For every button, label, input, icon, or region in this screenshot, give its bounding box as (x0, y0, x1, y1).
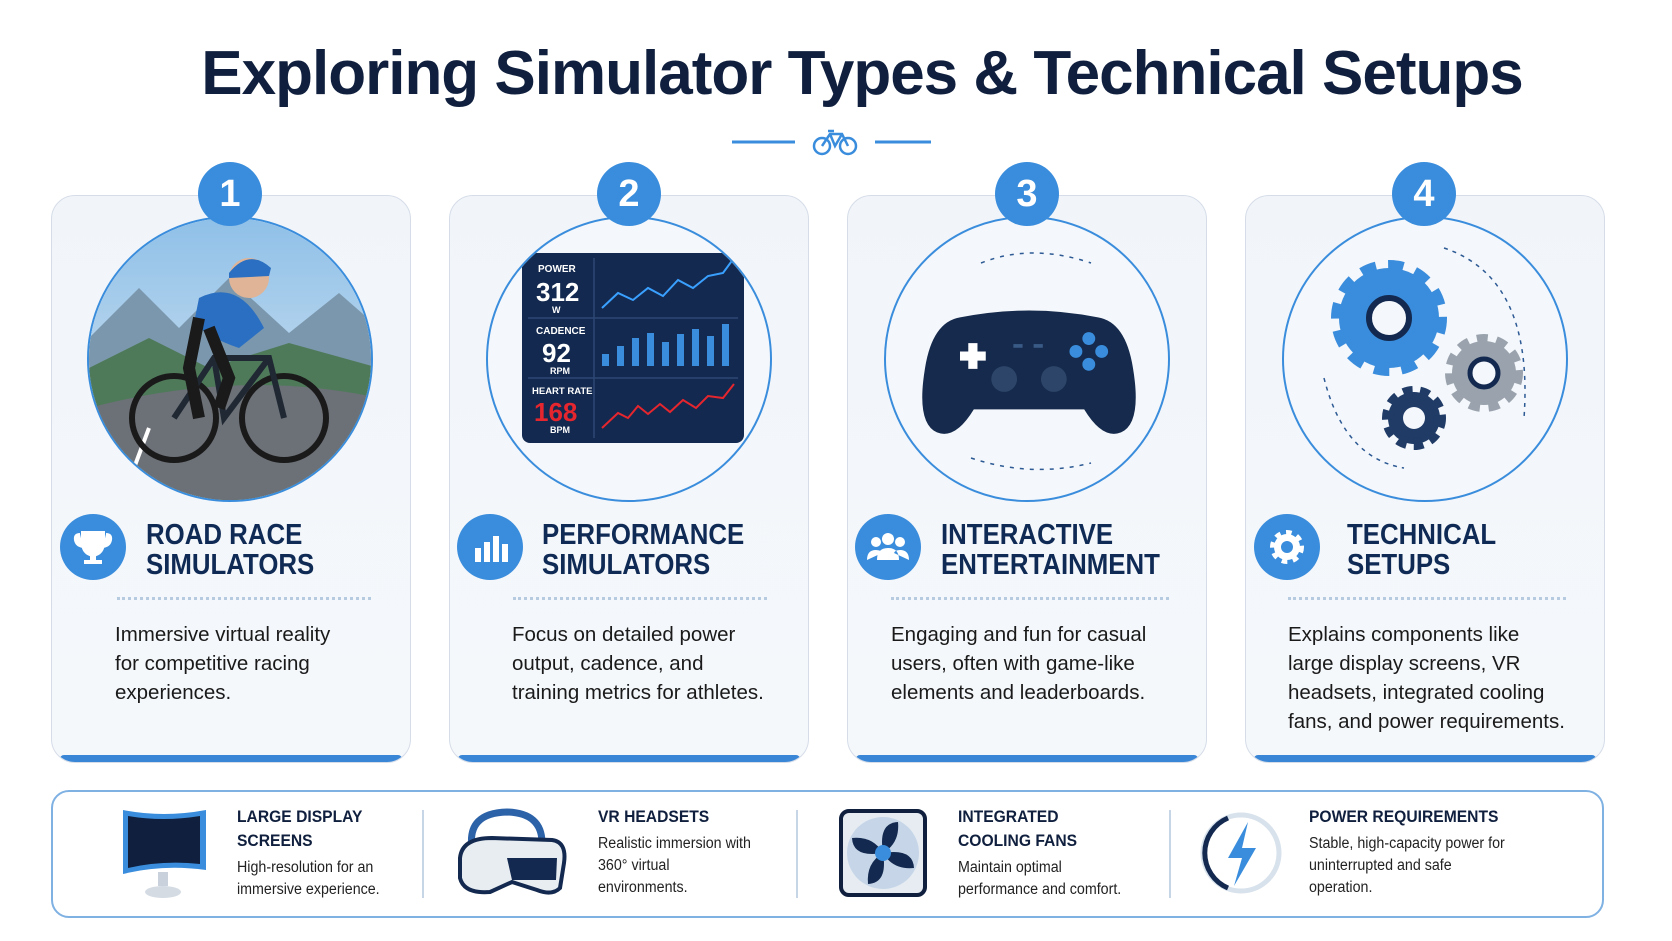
component 2 text: VR HEADSETS (598, 807, 709, 826)
component 1 text (237, 807, 380, 898)
image circle 4: gears (1282, 216, 1568, 502)
image circle 2: dashboard: 312 (536, 277, 579, 307)
heading 1 (146, 519, 314, 581)
heading 4 (1347, 519, 1496, 581)
component 4 text: POWER REQUIREMENTS (1309, 807, 1498, 826)
icon: trophy (60, 514, 126, 580)
heading 1: ROAD RACE (146, 519, 302, 551)
component 3 text (958, 807, 1121, 898)
number 2 (597, 162, 661, 226)
heading 2: PERFORMANCE (542, 519, 744, 551)
heading 3 (941, 519, 1160, 581)
card 4: technical (1245, 195, 1605, 763)
description 1: Immersive virtual reality for competitive racing experiences. (115, 623, 330, 704)
image circle 2: dashboard: 92 (542, 338, 571, 368)
heading 2: SIMULATORS (542, 549, 710, 581)
number 3: 3 (1016, 173, 1038, 215)
card 1: road race (51, 195, 411, 763)
icon: cooling fan (839, 809, 927, 897)
image circle 1: cyclist (87, 216, 373, 502)
number 3 (995, 162, 1059, 226)
icon: gear (1254, 514, 1320, 580)
card 2: performance (449, 195, 809, 763)
bottom panel: components (51, 790, 1604, 918)
heading 2 (542, 519, 744, 581)
number 1: 1 (219, 173, 241, 215)
image circle 2: dashboard: W (552, 305, 561, 315)
component 3 text: Maintain optimal performance and comfort. (958, 859, 1121, 898)
image circle 2: dashboard: BPM (550, 425, 570, 435)
heading 1: SIMULATORS (146, 549, 314, 581)
number 1 (198, 162, 262, 226)
description 4: Explains components like (1288, 623, 1519, 646)
component 2 text (598, 807, 751, 896)
description 4 (1288, 623, 1565, 733)
image circle 2: dashboard (486, 216, 772, 502)
title ornament: bike icon with lines (732, 130, 931, 156)
icon: lightning bolt (1200, 812, 1282, 894)
description 3: Engaging and fun for casual users, often with game-like elements and leaderboards. (891, 623, 1146, 704)
number 4: 4 (1413, 173, 1435, 215)
image circle 2: dashboard: CADENCE (536, 326, 586, 337)
description 2: Focus on detailed power output, cadence, and training metrics for athletes. (512, 623, 764, 704)
heading 4: SETUPS (1347, 549, 1450, 581)
component 1 text: High-resolution for an immersive experience. (237, 859, 380, 898)
component 2 text: Realistic immersion with 360° virtual environments. (598, 835, 751, 896)
heading 3: ENTERTAINMENT (941, 549, 1160, 581)
heading 4: TECHNICAL (1347, 519, 1496, 551)
card 3: interactive (847, 195, 1207, 763)
component 3 text: COOLING FANS (958, 831, 1077, 850)
image circle 2: dashboard: HEART RATE (532, 386, 593, 397)
component 4 text: Stable, high-capacity power for uninterrupted and safe operation. (1309, 835, 1505, 896)
description 4: fans, and power requirements. (1288, 710, 1565, 733)
icon: bar chart (457, 514, 523, 580)
number 4 (1392, 162, 1456, 226)
image circle 3: gamepad (884, 216, 1170, 502)
icon: VR headset (458, 808, 566, 895)
description 4: headsets, integrated cooling (1288, 681, 1544, 704)
heading 3: INTERACTIVE (941, 519, 1113, 551)
component 3 text: INTEGRATED (958, 807, 1059, 826)
icon: monitor (123, 810, 206, 898)
component 4 text (1309, 807, 1505, 896)
image circle 2: dashboard: POWER (538, 264, 577, 275)
description 4: large display screens, VR (1288, 652, 1520, 675)
component 1 text: LARGE DISPLAY (237, 807, 362, 826)
image circle 2: dashboard: 168 (534, 397, 577, 427)
component 1 text: SCREENS (237, 831, 313, 850)
icon: people (855, 514, 921, 580)
image circle 2: dashboard: RPM (550, 366, 570, 376)
title: Exploring Simulator Types & Technical Setups (201, 39, 1523, 108)
number 2: 2 (618, 173, 640, 215)
